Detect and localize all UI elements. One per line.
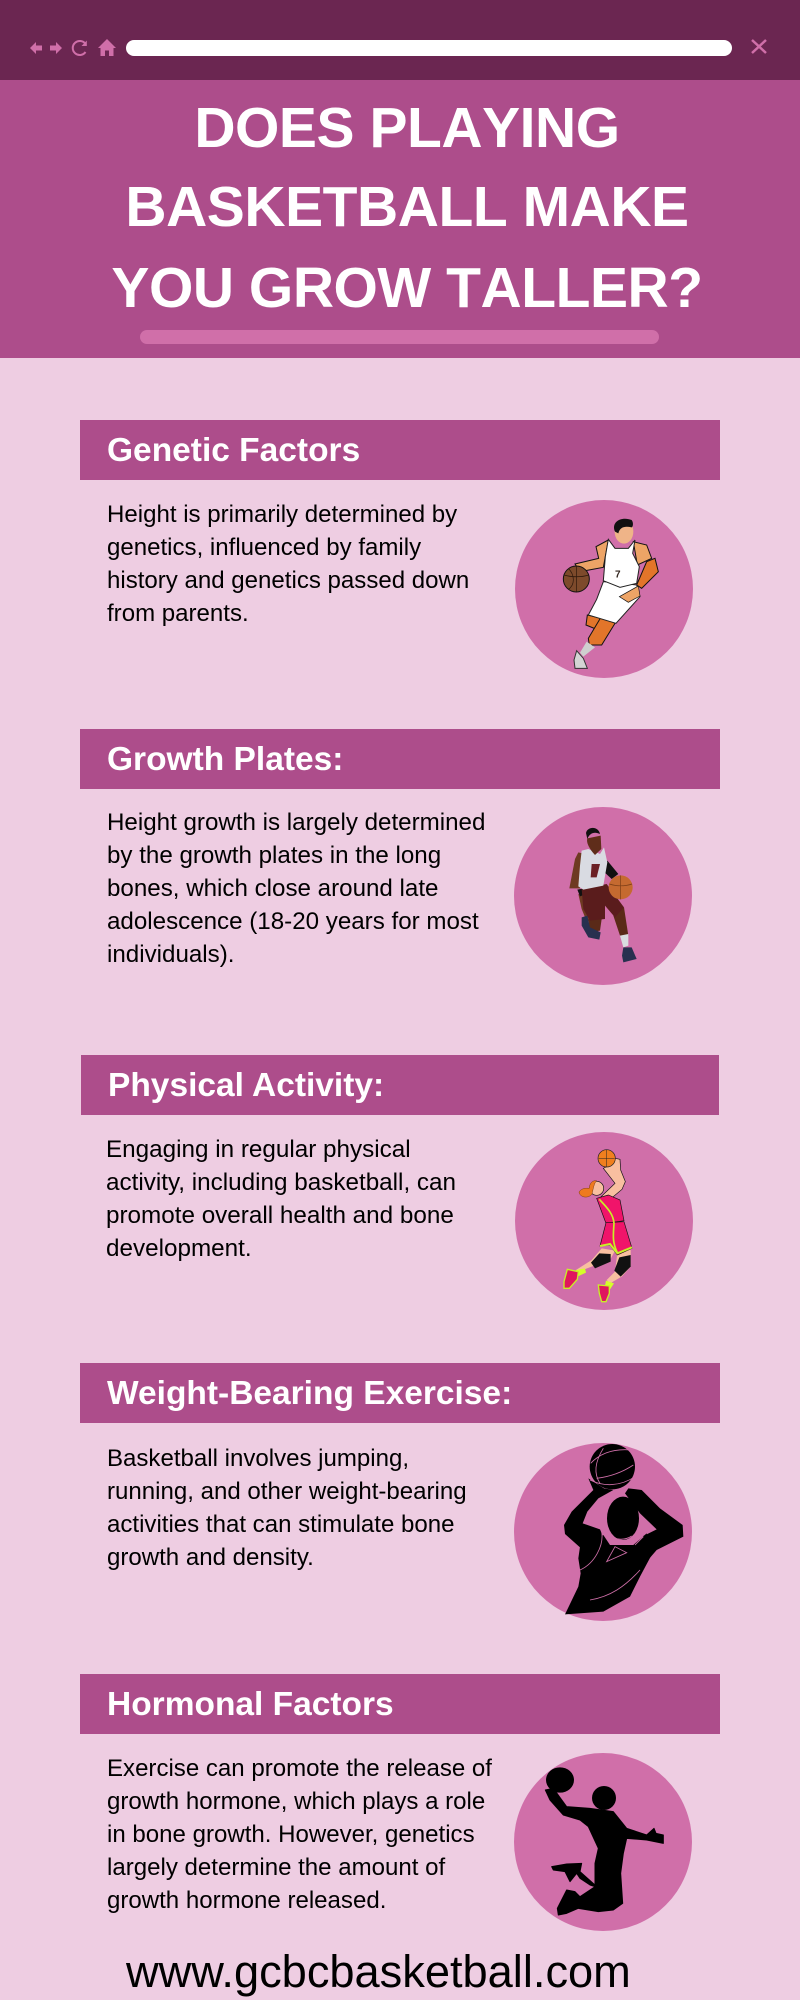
title: YOU GROW TALLER?	[111, 256, 703, 320]
body text: by the growth plates in the long	[107, 842, 441, 869]
icon: forward arrow	[50, 42, 62, 54]
title: DOES PLAYING	[194, 96, 620, 160]
heading band	[80, 1363, 720, 1423]
body text: genetics, influenced by family	[107, 534, 421, 561]
icon: reload	[72, 40, 87, 56]
address bar	[126, 40, 732, 56]
body text: bones, which close around late	[107, 875, 438, 902]
title	[111, 96, 703, 320]
body text: history and genetics passed down	[107, 567, 469, 594]
browser bar	[0, 0, 800, 80]
body text	[107, 809, 485, 968]
icon circle	[515, 500, 693, 678]
heading: Growth Plates:	[107, 741, 343, 778]
body text: growth hormone released.	[107, 1887, 386, 1914]
title: BASKETBALL MAKE	[125, 175, 689, 239]
body text: Height growth is largely determined	[107, 809, 485, 836]
body text	[107, 1445, 467, 1571]
heading: Hormonal Factors	[107, 1686, 394, 1723]
footer url: www.gcbcbasketball.com	[126, 1946, 631, 1997]
icon circle	[514, 807, 692, 985]
icon: home	[98, 39, 116, 56]
panel: hormonal factors	[80, 1674, 720, 1931]
body text: adolescence (18-20 years for most	[107, 908, 479, 935]
icon: shooter silhouette	[564, 1444, 684, 1614]
body text: from parents.	[107, 600, 249, 627]
icon: player with ball	[569, 828, 637, 962]
panel: growth plates	[80, 729, 720, 985]
body text: running, and other weight-bearing	[107, 1478, 467, 1505]
body text: development.	[106, 1235, 252, 1262]
icon: dunking silhouette	[544, 1767, 664, 1916]
heading band	[80, 729, 720, 789]
icon: player shooting	[563, 1149, 632, 1302]
body text: largely determine the amount of	[107, 1854, 445, 1881]
title banner	[0, 80, 800, 358]
icon circle	[514, 1443, 692, 1621]
panel: genetic factors	[80, 420, 720, 678]
body text: growth and density.	[107, 1544, 314, 1571]
body text	[107, 1755, 492, 1914]
body text: Engaging in regular physical	[106, 1136, 411, 1163]
heading: Genetic Factors	[107, 432, 360, 469]
heading: Physical Activity:	[108, 1067, 384, 1104]
body text: activities that can stimulate bone	[107, 1511, 455, 1538]
body text: Basketball involves jumping,	[107, 1445, 409, 1472]
icon: player dribbling: 7	[615, 569, 621, 580]
body text: activity, including basketball, can	[106, 1169, 456, 1196]
heading band	[81, 1055, 719, 1115]
icon circle	[515, 1132, 693, 1310]
icon: back arrow	[30, 42, 42, 54]
icon: player dribbling	[562, 518, 659, 669]
heading: Weight-Bearing Exercise:	[107, 1375, 512, 1412]
panel: physical activity	[81, 1055, 719, 1310]
body text: individuals).	[107, 941, 234, 968]
body text: promote overall health and bone	[106, 1202, 454, 1229]
heading band	[80, 1674, 720, 1734]
panel: weight-bearing exercise	[80, 1363, 720, 1621]
icon: close	[751, 39, 767, 54]
body text: in bone growth. However, genetics	[107, 1821, 475, 1848]
icon circle	[514, 1753, 692, 1931]
body text: Exercise can promote the release of	[107, 1755, 492, 1782]
body text: growth hormone, which plays a role	[107, 1788, 485, 1815]
body text: Height is primarily determined by	[107, 501, 457, 528]
body text	[106, 1136, 456, 1262]
title underline bar	[140, 330, 659, 344]
heading band	[80, 420, 720, 480]
body text	[107, 501, 469, 627]
